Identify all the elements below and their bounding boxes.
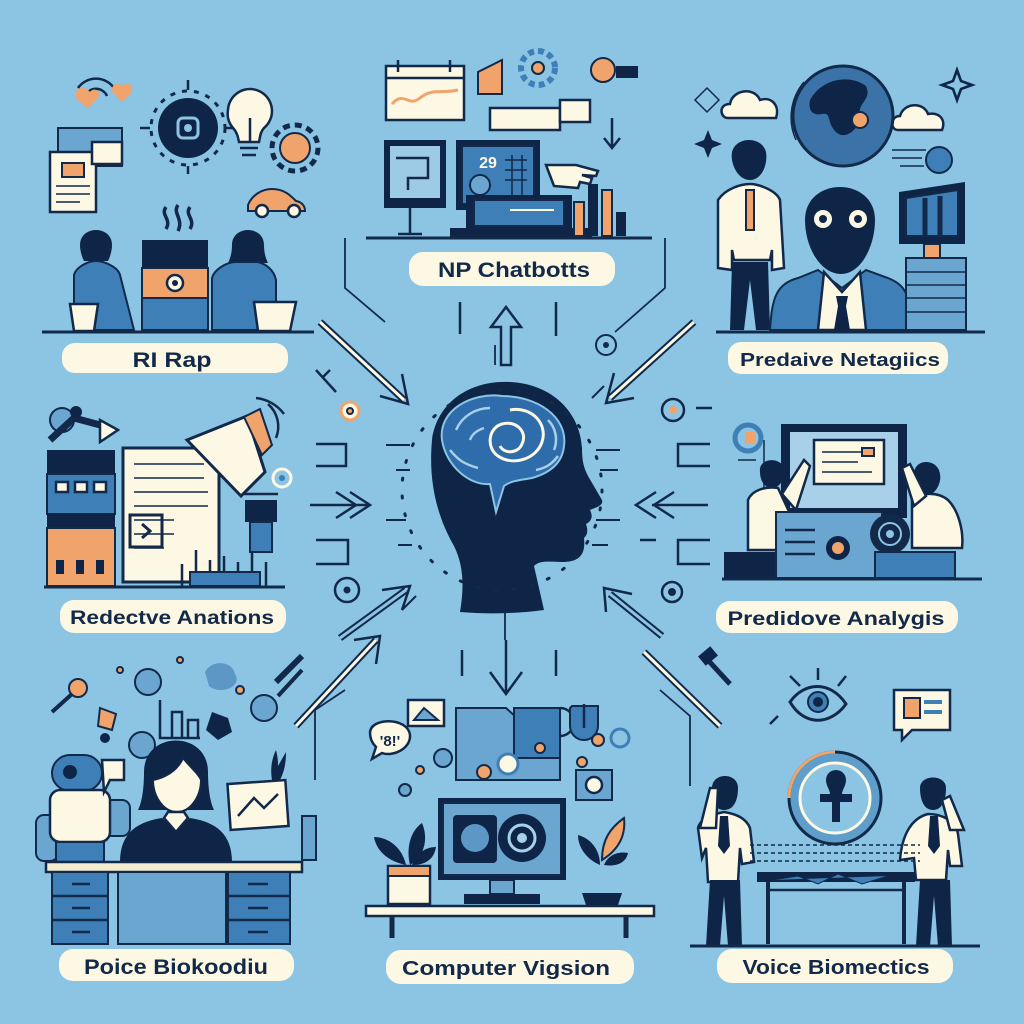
coin icon <box>735 425 764 488</box>
person right <box>212 230 276 330</box>
gears <box>399 729 629 800</box>
floating chat icons <box>370 700 444 759</box>
label pill <box>60 600 286 633</box>
label pill <box>386 950 634 984</box>
panel: RI Rap <box>42 79 318 373</box>
small bars <box>182 550 266 586</box>
panel: Poice Biokoodiu <box>36 657 316 981</box>
monitor left <box>384 140 446 234</box>
plant left <box>374 823 436 904</box>
label pill: Predaive Netagiics <box>740 349 940 370</box>
radial ticks <box>386 386 620 610</box>
icon: car <box>248 189 305 217</box>
man standing <box>718 140 784 330</box>
lens <box>789 752 881 844</box>
icon: wifi and hearts <box>75 79 132 108</box>
desk <box>366 906 654 938</box>
person left <box>74 230 134 330</box>
screen <box>781 424 907 518</box>
tool <box>698 646 730 684</box>
floating chat icons: '8!' <box>380 733 400 750</box>
panel: Redective Anations <box>44 398 291 633</box>
lamp <box>187 398 284 496</box>
monitor centre <box>456 140 540 210</box>
eye <box>770 668 846 724</box>
label pill: RI Rap <box>132 349 212 372</box>
monitor centre: 29 <box>479 155 497 172</box>
panel: Voice Biomectics <box>690 646 980 983</box>
icon: steam <box>164 205 192 231</box>
masked man <box>770 187 912 330</box>
arrow: right <box>636 444 710 564</box>
machine <box>142 240 208 330</box>
label pill: Redectve Anations <box>70 608 274 629</box>
man left <box>698 776 754 946</box>
label pill <box>409 252 615 286</box>
chat box <box>894 690 950 740</box>
label pill <box>62 343 288 373</box>
panel: Predictive Netagics <box>694 66 985 374</box>
icon: windows <box>50 128 122 212</box>
arrow: bottom-right double <box>604 588 720 726</box>
label pill <box>59 949 294 981</box>
folder <box>456 708 574 780</box>
cups <box>70 302 296 331</box>
hand <box>546 165 598 188</box>
dotted ring <box>402 390 602 590</box>
calendar <box>386 60 464 120</box>
sparkles <box>694 66 976 158</box>
arrow: top <box>491 307 521 365</box>
monitor right <box>899 182 966 330</box>
table <box>750 845 920 944</box>
icon: light bulb <box>228 89 272 155</box>
arrow: top-left <box>320 322 408 404</box>
label pill: Computer Vigsion <box>402 958 610 980</box>
clouds <box>722 91 943 130</box>
label pill: Poice Biokoodiu <box>84 956 268 979</box>
icon: gear orange <box>272 125 318 171</box>
central head <box>431 382 602 613</box>
chart board <box>227 750 316 860</box>
robot arm <box>50 406 118 442</box>
small globe <box>892 147 952 173</box>
icons top <box>478 51 638 148</box>
camera console <box>724 512 955 578</box>
arrow: bottom-left double <box>276 586 410 726</box>
floating icons <box>52 657 302 758</box>
panel: Computer Vision <box>366 700 654 984</box>
brain <box>442 395 564 512</box>
panel: NP Chatbots <box>366 51 652 286</box>
label pill: Voice Biomectics <box>742 957 930 979</box>
icon: central gear <box>140 80 234 174</box>
arrow: left <box>310 444 370 564</box>
connector lines <box>315 238 690 786</box>
laptop <box>450 195 592 238</box>
man right <box>900 778 964 946</box>
robot <box>36 755 130 862</box>
node icons <box>316 335 712 602</box>
plant right <box>578 818 628 905</box>
arrow: bottom <box>462 640 556 694</box>
woman <box>120 740 232 862</box>
lamp stand <box>244 494 278 552</box>
panel: Predidove Analygis <box>716 424 982 633</box>
label pill <box>716 601 958 633</box>
monitor <box>438 798 566 904</box>
globe <box>791 66 893 166</box>
arrow: top-right <box>606 322 694 403</box>
label pill <box>728 342 948 374</box>
person right <box>902 462 962 548</box>
person left <box>748 460 810 550</box>
document <box>123 448 219 582</box>
label pill: Predidove Analygis <box>728 609 944 630</box>
bubble <box>570 704 598 740</box>
label pill: NP Chatbotts <box>438 259 590 282</box>
bars <box>574 184 626 236</box>
server stack <box>47 450 115 586</box>
target small <box>273 469 291 487</box>
label pill <box>717 949 953 983</box>
desk <box>46 862 302 944</box>
